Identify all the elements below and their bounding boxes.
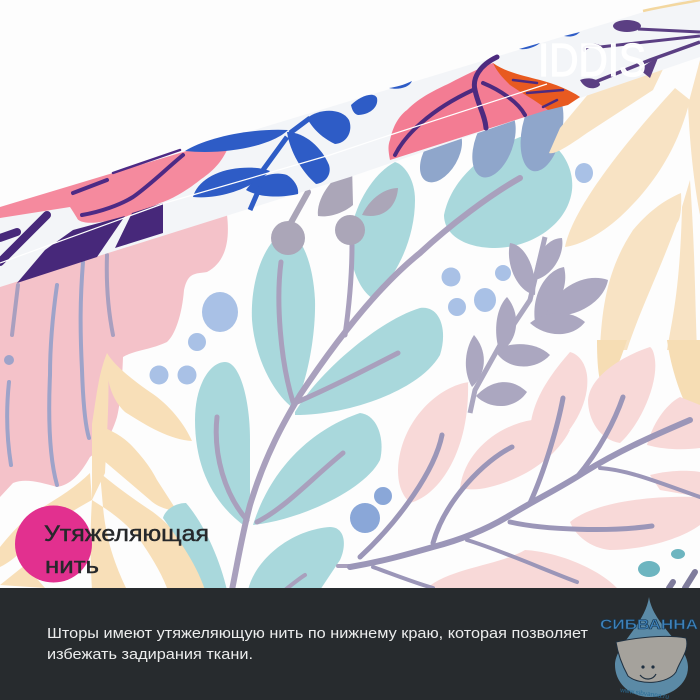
pale pink flower, left [0,215,228,497]
blue dots [150,163,593,384]
peach leaves, upper right [549,60,700,350]
upper branch with side stems [216,178,520,590]
purple marks, far left [0,215,47,262]
callout heading: Утяжеляющая [44,521,209,546]
purple buds, upper right [580,20,700,88]
blue-grey leaves under the hem [411,85,570,189]
panel: folded hem [0,0,700,287]
pale stripes on the left flower [7,255,113,485]
lower branch with side stems [350,397,700,588]
brand logo IDDIS: IDDIS [538,34,646,86]
dark purple band [17,203,163,283]
deeper blue dots near lower branch [350,487,392,533]
description text: избежать задирания ткани. [47,647,253,663]
seam stitching [0,84,547,263]
hem fabric [0,0,700,287]
pink petal, left [0,137,233,223]
yellow leaf edge [643,0,700,11]
blue leaves [185,32,580,210]
panel: dark description bar [0,588,700,700]
teal dots [638,549,685,577]
dark strokes on the pink petal [73,150,183,215]
callout: weighted thread [15,506,209,582]
stripe dot [4,355,14,365]
peach leaves, lower left [0,353,210,590]
bathtub [616,636,687,682]
panel: lower curtain fabric with pastel print [0,60,700,590]
pink circle [15,506,92,582]
tub face [640,665,656,679]
orange petal [493,63,580,110]
logo: Сибванна [600,597,698,700]
description text: Шторы имеют утяжеляющую нить по нижнему краю, которая позволяет [47,626,588,642]
lilac sprig [466,237,608,413]
berries and twig leaves [271,165,398,255]
teal leaves, left branch [163,136,572,590]
pink petal, right [388,63,580,160]
water drop [615,597,688,697]
logo name: СИБВАННА [600,616,698,632]
dark veins on right petal [395,57,563,155]
callout heading: нить [45,553,99,578]
deeper peach leaves, right edge [597,340,700,428]
pale pink leaves, lower right [398,347,700,588]
